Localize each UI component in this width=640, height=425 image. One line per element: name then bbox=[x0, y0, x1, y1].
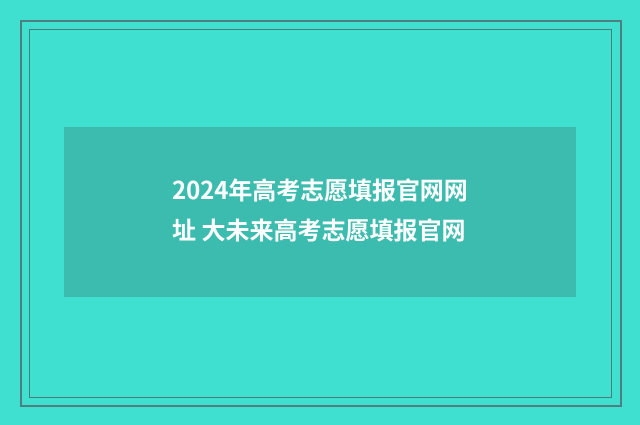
title text bbox=[172, 171, 468, 246]
inner frame bbox=[29, 29, 612, 398]
title panel bbox=[64, 127, 576, 297]
title text: 2024年高考志愿填报官网网 bbox=[172, 171, 468, 206]
title text: 址 大未来高考志愿填报官网 bbox=[172, 211, 465, 246]
